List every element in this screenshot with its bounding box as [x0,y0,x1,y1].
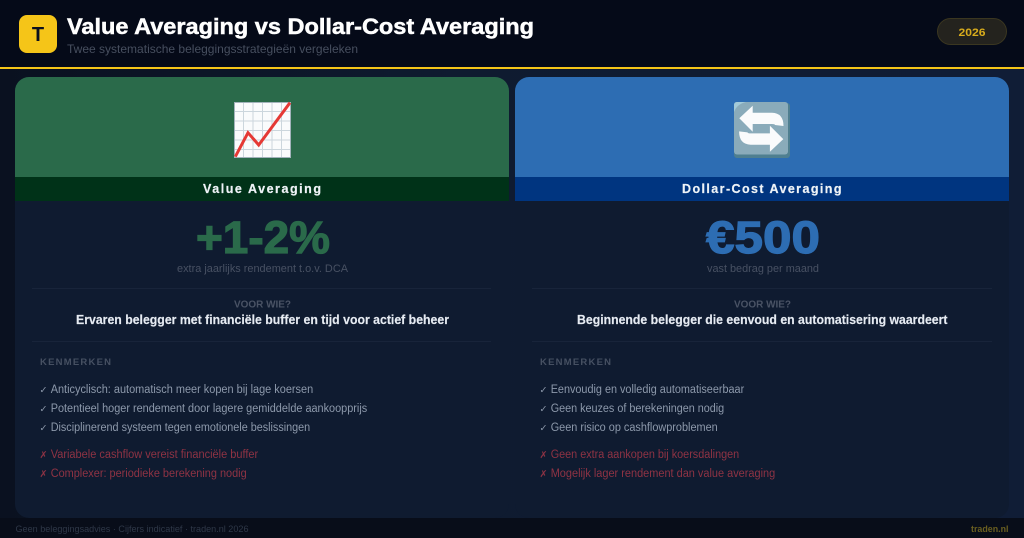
panel: value averaging [15,77,509,518]
subtitle: Twee systematische beleggingsstrategieën vergeleken [67,42,358,56]
cons list: Mogelijk lager rendement dan value averaging [551,468,775,480]
big number: €500 [706,212,820,263]
title: Value Averaging vs Dollar-Cost Averaging [67,14,534,39]
header [0,0,1024,69]
disclaimer: Geen beleggingsadvies · Cijfers indicatief · traden.nl 2026 [16,524,248,535]
band label: Dollar-Cost Averaging [682,182,842,196]
pros list: Disciplinerend systeem tegen emotionele beslissingen [51,422,310,434]
pros list: Potentieel hoger rendement door lagere gemiddelde aankoopprijs [51,403,367,415]
band label: Value Averaging [203,182,321,196]
cons list: ✗ [40,469,47,480]
audience label: VOOR WIE? [234,298,291,310]
cons list: Complexer: periodieke berekening nodig [51,468,247,480]
metric caption: vast bedrag per maand [707,263,819,275]
audience label: VOOR WIE? [734,298,791,310]
cons list [40,449,258,480]
metric caption: extra jaarlijks rendement t.o.v. DCA [177,263,349,275]
footer brand: traden.nl [971,524,1008,535]
pros list: ✓ [40,423,47,434]
audience text: Beginnende belegger die eenvoud en automatisering waardeert [577,313,948,327]
pros list: Geen risico op cashflowproblemen [551,422,718,434]
logo: T [32,24,44,46]
cons list: ✗ [540,450,547,461]
cons list: Variabele cashflow vereist financiële buffer [51,449,258,461]
pros list: Eenvoudig en volledig automatiseerbaar [551,384,744,396]
icon: chart increasing [234,102,291,158]
year badge: 2026 [958,27,986,39]
cons list [540,449,775,480]
footer [0,518,1024,538]
features heading: KENMERKEN [40,357,111,368]
pros list [40,384,367,434]
pros list: Anticyclisch: automatisch meer kopen bij lage koersen [51,384,313,396]
cons list: ✗ [540,469,547,480]
cons list: Geen extra aankopen bij koersdalingen [551,449,739,461]
pros list: Geen keuzes of berekeningen nodig [551,403,724,415]
icon: repeat arrows [734,102,790,158]
pros list: ✓ [540,385,547,396]
cons list: ✗ [40,450,47,461]
pros list [540,384,744,434]
audience text: Ervaren belegger met financiële buffer en tijd voor actief beheer [76,313,449,327]
pros list: ✓ [40,404,47,415]
pros list: ✓ [40,385,47,396]
pros list: ✓ [540,404,547,415]
logo [19,15,57,53]
features heading: KENMERKEN [540,357,611,368]
big number: +1-2% [196,212,330,263]
panel: dollar-cost averaging [515,77,1009,518]
year badge [938,18,1006,44]
pros list: ✓ [540,423,547,434]
